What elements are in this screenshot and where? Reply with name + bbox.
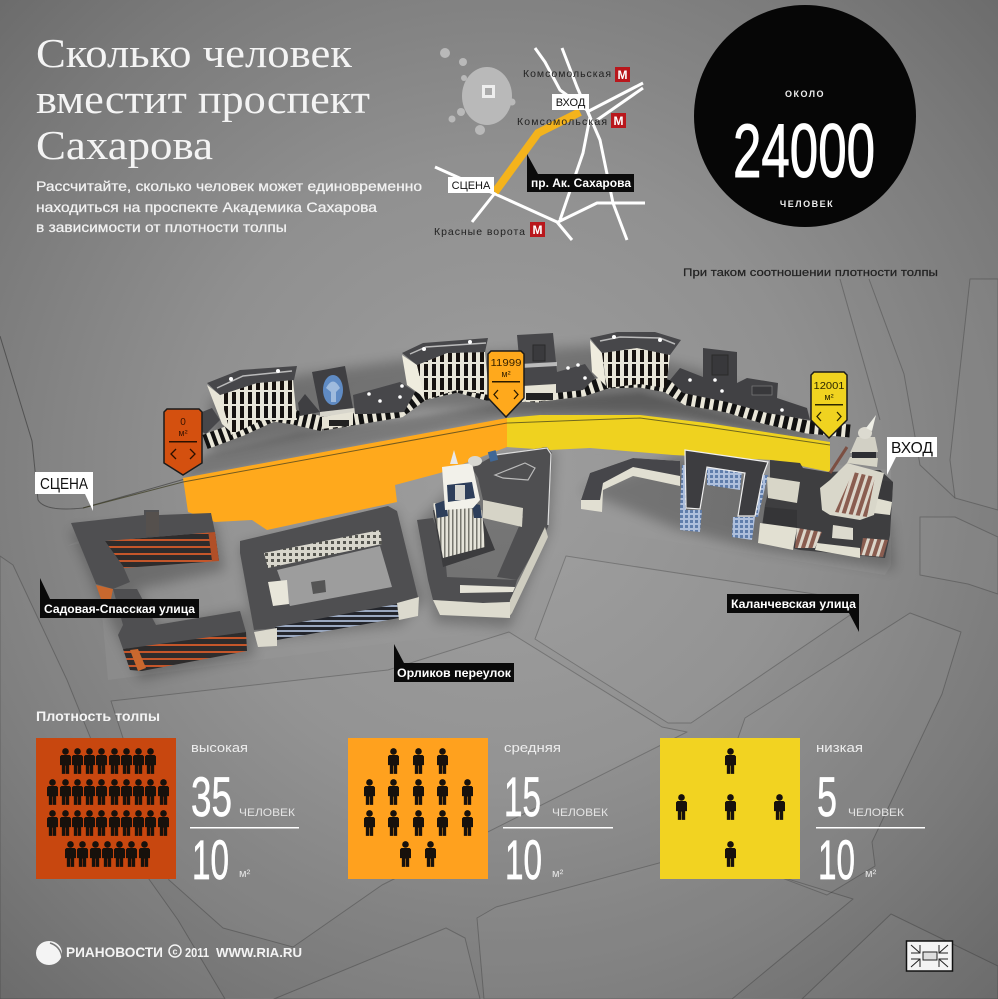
title: Сколько человек <box>36 30 352 76</box>
building shadows <box>70 345 895 680</box>
entrance label: ВХОД <box>556 97 586 109</box>
density caption: При таком соотношении плотности толпы <box>683 267 938 279</box>
stats: ЧЕЛОВЕК <box>552 807 609 819</box>
stats: 5 <box>817 765 837 828</box>
density panel: medium <box>348 738 613 891</box>
dark mass <box>760 460 893 558</box>
stats <box>503 741 613 891</box>
subtitle text: в зависимости от плотности толпы <box>36 219 287 235</box>
total circle: 24000 <box>733 109 875 194</box>
entrance label <box>552 94 589 110</box>
label: Sadovaya-Spasskaya street: Садовая-Спасская улица <box>44 602 195 616</box>
subtitle text: находиться на проспекте Академика Сахарова <box>36 199 377 215</box>
density panel: low <box>660 738 925 891</box>
total circle: ЧЕЛОВЕК <box>780 199 834 209</box>
title: Сахарова <box>36 122 213 168</box>
stats: м² <box>552 868 564 880</box>
locator map <box>434 48 645 240</box>
stats: ЧЕЛОВЕК <box>239 807 296 819</box>
stats: 10 <box>505 828 542 891</box>
moscow silhouette <box>440 48 516 135</box>
п-shaped tower <box>680 450 768 540</box>
connector roof <box>353 382 415 414</box>
stats <box>816 741 925 891</box>
facade band <box>205 381 850 442</box>
title <box>36 30 370 168</box>
marker: 12001 m² <box>811 372 847 438</box>
footer logo: c <box>172 946 178 956</box>
shade between row and avenue <box>183 392 830 478</box>
eastern roof <box>670 348 810 420</box>
label: entrance <box>887 437 937 475</box>
avenue highlight <box>495 112 580 192</box>
footer logo: WWW.RIA.RU <box>216 945 302 960</box>
icon: fullscreen toggle <box>906 941 952 971</box>
marker: 11999 m²: м² <box>501 369 511 379</box>
label: stage: СЦЕНА <box>40 476 88 493</box>
metro labels: Красные ворота <box>434 226 525 238</box>
avenue label: пр. Ак. Сахарова <box>531 178 632 190</box>
stats: 15 <box>504 765 541 828</box>
label: stage <box>35 472 93 511</box>
metro icons: М <box>532 223 542 237</box>
label: Orlikov lane: Орликов переулок <box>397 666 512 680</box>
marker: 12001 m²: м² <box>824 392 834 402</box>
metro labels <box>434 68 611 238</box>
crowd area: avenue <box>83 415 830 530</box>
low curved building <box>581 458 680 512</box>
stats: средняя <box>504 741 561 755</box>
marker: 0 m²: м² <box>178 428 188 438</box>
subtitle text: Рассчитайте, сколько человек может единовременно <box>36 178 422 194</box>
footer logo: 2011 <box>185 945 209 960</box>
label: Kalanchevskaya street: Каланчевская улица <box>731 597 856 611</box>
crowd icons: 35 people <box>47 748 169 867</box>
stats: 10 <box>192 828 229 891</box>
marker: 0 m²: 0 <box>180 417 186 428</box>
stats: м² <box>239 868 251 880</box>
stage label: СЦЕНА <box>452 180 491 192</box>
northern building row <box>202 332 850 442</box>
title: вместит проспект <box>36 76 370 122</box>
label: Sadovaya-Spasskaya street <box>40 578 199 618</box>
stats <box>190 741 299 891</box>
main tower <box>820 415 884 520</box>
stats: низкая <box>816 741 863 755</box>
stats: 35 <box>191 765 232 828</box>
total circle <box>694 5 916 227</box>
marker: 0 m² <box>164 409 202 475</box>
stats: м² <box>865 868 877 880</box>
left end wing <box>202 408 220 434</box>
metro icons: М <box>614 114 624 128</box>
building: courtyard block <box>240 506 419 647</box>
building: southwest brick wing <box>71 510 247 671</box>
icon: globe <box>36 941 65 965</box>
tower <box>433 450 498 558</box>
building: eastern complex <box>581 415 893 558</box>
curved block 3 <box>590 332 681 388</box>
marker: 11999 m² <box>488 351 524 417</box>
yellow section <box>507 415 830 472</box>
label: entrance: ВХОД <box>891 440 933 457</box>
marker: 12001 m²: 12001 <box>814 381 845 392</box>
stats: 10 <box>818 828 855 891</box>
square block <box>517 333 595 402</box>
metro labels: Комсомольская <box>523 68 611 80</box>
stage label <box>448 177 494 193</box>
monument block <box>298 366 355 429</box>
marker: 11999 m²: 11999 <box>490 358 522 369</box>
metro icons <box>530 67 630 237</box>
building plates <box>67 460 554 680</box>
stats: высокая <box>191 741 248 755</box>
footer logo: РИАНОВОСТИ <box>66 944 163 960</box>
total circle: ОКОЛО <box>785 89 825 99</box>
white wings <box>767 477 800 503</box>
orange section <box>183 418 507 530</box>
curved block 2 <box>402 338 489 400</box>
metro icons: М <box>618 68 628 82</box>
crowd icons: 5 people <box>676 748 785 867</box>
metro labels: Комсомольская <box>517 116 607 128</box>
avenue label <box>527 154 634 192</box>
building: triangular block with tower <box>417 447 552 618</box>
city blocks <box>0 279 998 999</box>
street lines <box>435 48 645 240</box>
label: Kalanchevskaya street <box>727 594 859 632</box>
subtitle text <box>36 178 422 235</box>
label: Orlikov lane <box>394 644 514 682</box>
curved block 1 <box>207 366 297 435</box>
footer logo <box>36 941 302 965</box>
stats: ЧЕЛОВЕК <box>848 807 905 819</box>
density panel: high <box>36 738 299 891</box>
crowd icons: 15 people <box>364 748 473 867</box>
legend heading: Плотность толпы <box>36 708 160 724</box>
